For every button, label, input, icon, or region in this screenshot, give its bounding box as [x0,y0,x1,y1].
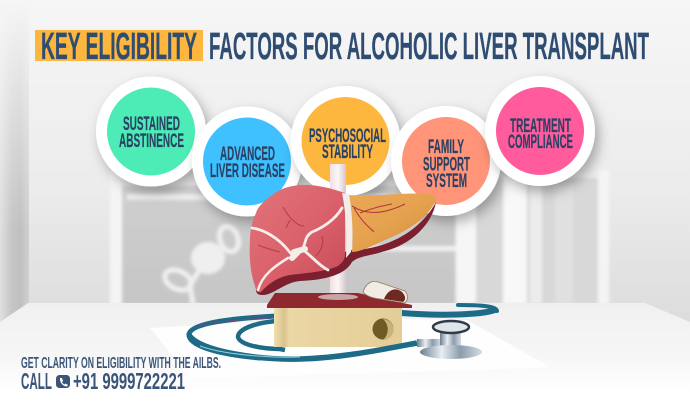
eligibility line: GET CLARITY ON ELIGIBILITY WITH THE AILBS. [21,355,221,372]
table top [0,303,690,407]
circle: sustained abstinence: SUSTAINED [123,113,180,135]
call label: CALL [21,368,52,394]
wooden box [274,308,402,347]
phone number: +91 9999722221 [73,368,185,394]
circle: psychosocial stability: STABILITY [322,141,373,163]
circle: advanced liver disease: ADVANCED [220,143,275,165]
stethoscope front tube and chest piece [189,321,482,359]
circle: advanced liver disease: LIVER DISEASE [210,160,285,182]
title [35,26,649,68]
circle: sustained abstinence [96,76,206,186]
circle: psychosocial stability: PSYCHOSOCIAL [309,125,386,147]
circle: treatment compliance: COMPLIANCE [508,131,573,153]
chest piece cup [433,321,469,333]
decorative ring toy [162,224,242,304]
veins on left lobe [258,207,323,256]
circle: advanced liver disease [192,106,302,216]
circle: family support system: SUPPORT [423,154,470,176]
icon: phone [56,375,70,388]
circle: treatment compliance [485,76,595,186]
liver model [250,164,436,347]
circle: family support system: FAMILY [428,136,464,158]
paper sheet under the model [150,318,550,378]
pole foot [318,294,358,300]
circle: psychosocial stability [290,86,400,196]
title highlighted words: KEY ELIGIBILITY [41,26,197,68]
liver dark underside [256,202,436,295]
stem [440,332,461,348]
right lobe [348,194,436,252]
circle: family support system: SYSTEM [426,170,467,192]
call to action [21,355,221,394]
circle: sustained abstinence: ABSTINENCE [119,130,184,152]
booklet [363,281,408,303]
circle: treatment compliance: TREATMENT [510,115,571,137]
stand base plate [267,293,412,308]
title highlight bar [35,30,203,61]
white ligaments [252,208,342,290]
connector [417,339,441,347]
left lobe [250,185,345,292]
stand pole [330,164,346,294]
chest piece disc [420,345,482,359]
veins on right lobe [352,204,405,232]
circle: family support system [391,106,501,216]
stethoscope tube behind the model [189,305,497,358]
white band [342,193,352,258]
